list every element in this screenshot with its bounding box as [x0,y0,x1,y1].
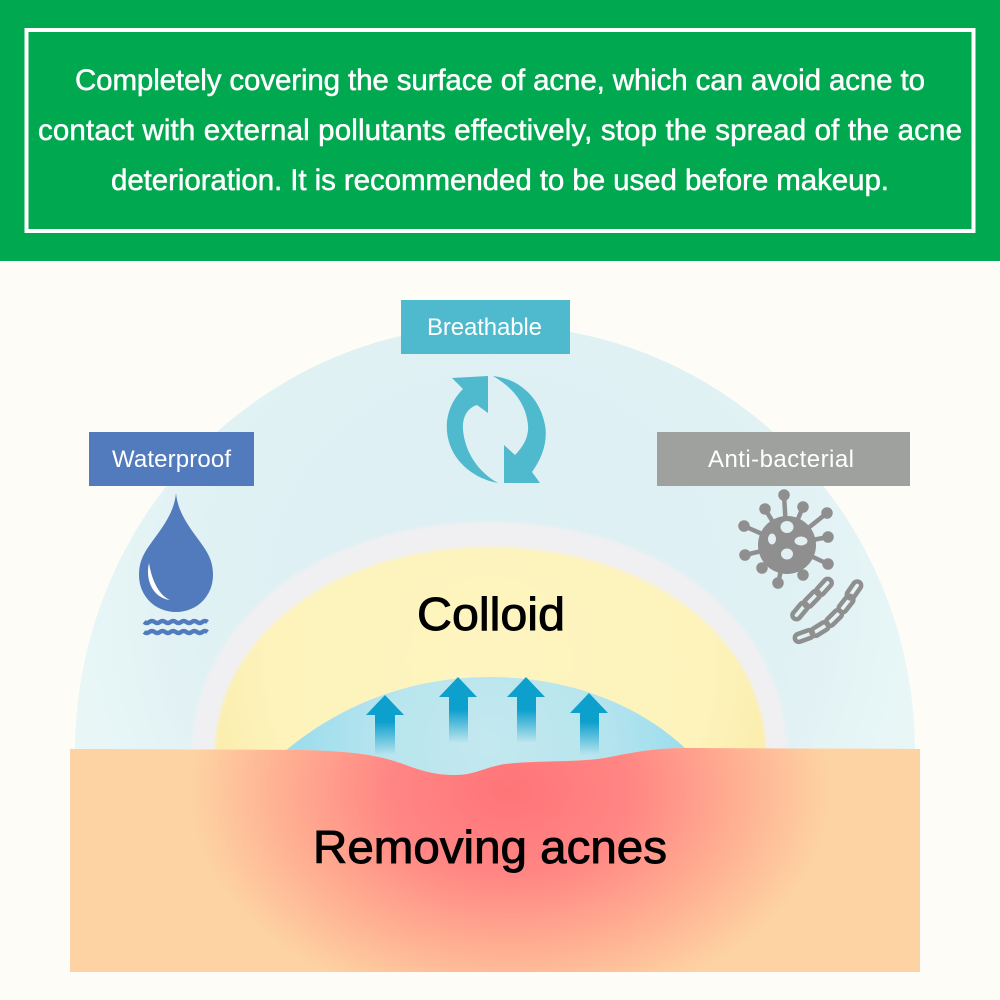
label: waterproof [89,432,254,486]
header banner [0,0,1000,261]
icon: water drop with waves [139,493,213,633]
white film ring [192,522,787,755]
icon: virus and bacteria chains [740,492,863,643]
label: anti-bacterial: Anti-bacterial [708,446,854,473]
label: breathable: Breathable [427,314,542,341]
skin block with acne redness [70,748,920,972]
breathable dome [75,325,915,752]
absorbed fluid layer [284,677,687,790]
colloid label: Colloid [417,588,565,640]
colloid yellow layer [215,547,766,755]
label: breathable [401,300,570,354]
label: waterproof: Waterproof [112,446,231,473]
label: anti-bacterial [657,432,910,486]
acne redness glow [70,748,920,972]
removing acnes label: Removing acnes [313,821,667,873]
upward arrows [366,677,608,755]
header banner: contact with external pollutants effectively, stop the spread of the acne [38,114,962,147]
icon: circular arrows [447,376,546,483]
header banner: Completely covering the surface of acne, which can avoid acne to [75,64,925,97]
header banner: deterioration. It is recommended to be used before makeup. [111,164,889,197]
